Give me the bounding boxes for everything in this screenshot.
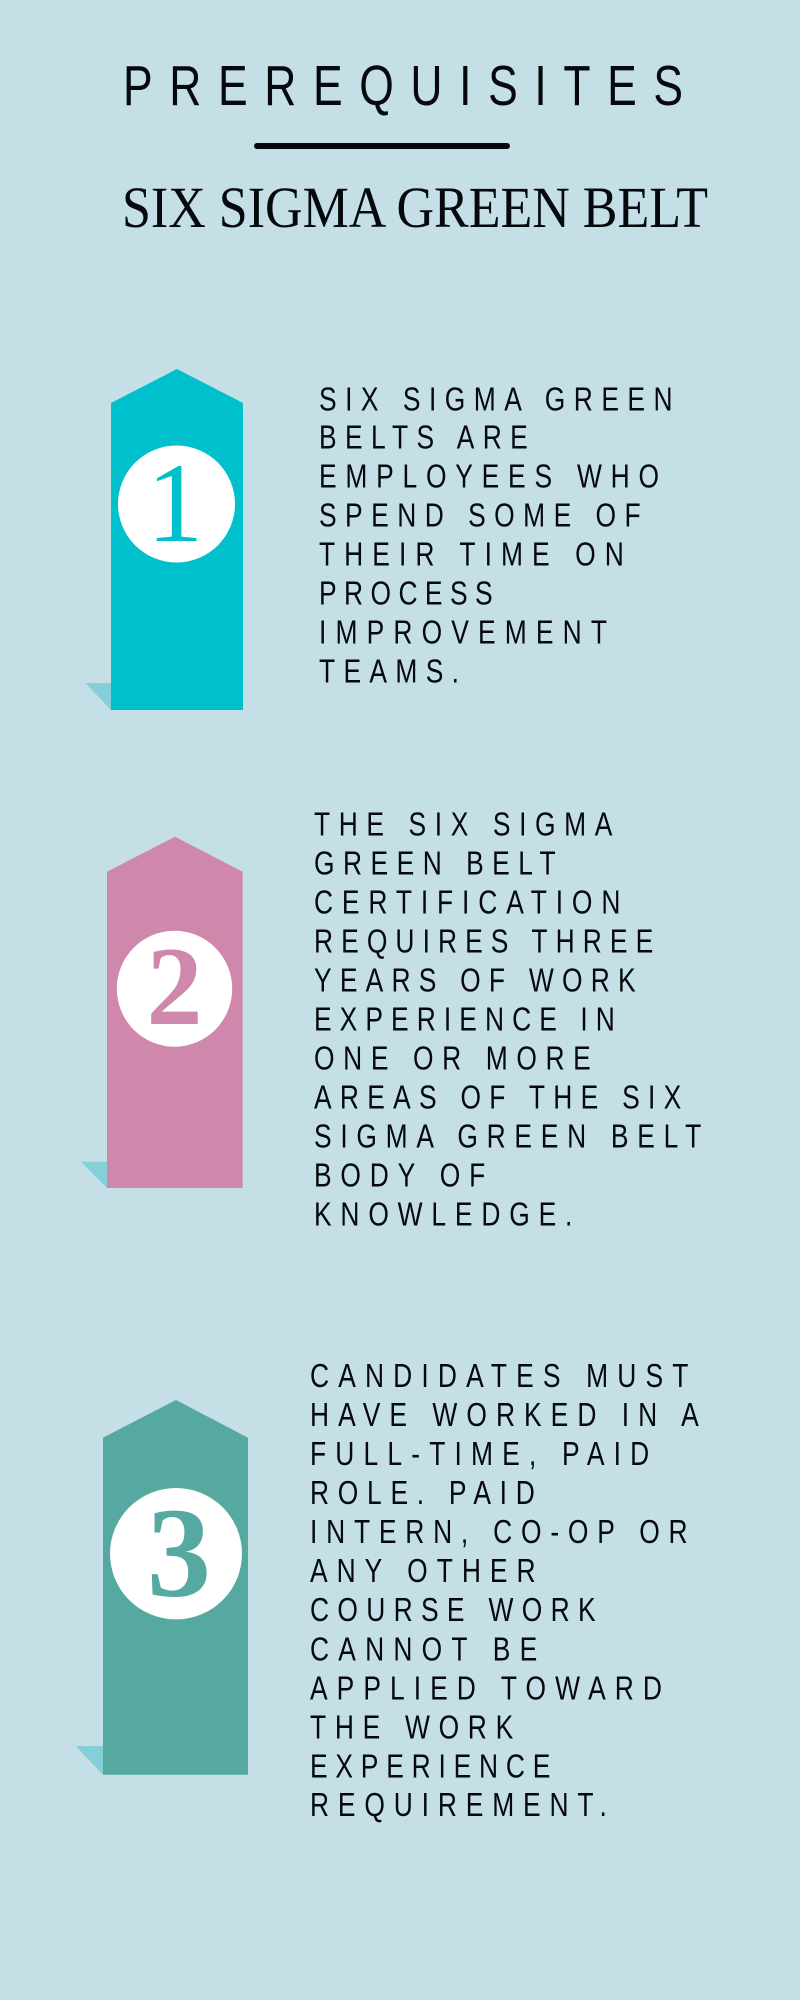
number badge: step 2 xyxy=(117,925,232,1049)
text block: step 2: THE SIX SIGMA xyxy=(314,807,612,843)
number badge: step 1 xyxy=(118,441,235,566)
text block: step 3: ROLE. PAID xyxy=(310,1475,535,1512)
text block: step 1: SPEND SOME OF xyxy=(319,498,641,534)
text block: step 3: APPLIED TOWARD xyxy=(310,1671,662,1707)
title underline xyxy=(254,143,510,149)
arrow banner: step 3 xyxy=(103,1400,248,1775)
text block: step 3: REQUIREMENT. xyxy=(310,1787,607,1824)
panel: step 1 xyxy=(86,369,673,710)
text block: step 2: KNOWLEDGE. xyxy=(314,1197,572,1233)
text block: step 2: AREAS OF THE SIX xyxy=(314,1080,681,1116)
text block: step 1 xyxy=(319,382,673,690)
text block: step 2: YEARS OF WORK xyxy=(314,963,636,999)
text block: step 3: THE WORK xyxy=(310,1710,513,1746)
text block: step 3: HAVE WORKED IN A xyxy=(310,1397,699,1434)
text block: step 1: PROCESS xyxy=(319,576,493,612)
text block: step 1: BELTS ARE xyxy=(319,420,528,456)
text block: step 1: IMPROVEMENT xyxy=(319,615,607,651)
panel: step 3 xyxy=(76,1358,699,1824)
text block: step 1: THEIR TIME ON xyxy=(319,537,624,573)
text block: step 3: COURSE WORK xyxy=(310,1592,596,1629)
number badge: step 2: 2 xyxy=(146,925,202,1049)
text block: step 2: SIGMA GREEN BELT xyxy=(314,1119,701,1155)
text block: step 1: SIX SIGMA GREEN xyxy=(319,382,673,418)
text block: step 2: GREEN BELT xyxy=(314,846,556,882)
number badge: step 3 xyxy=(110,1482,242,1624)
text block: step 3: CANNOT BE xyxy=(310,1632,537,1668)
fold: step 1 xyxy=(86,683,111,710)
text block: step 2: BODY OF xyxy=(314,1158,485,1194)
fold: step 3 xyxy=(76,1746,103,1775)
text block: step 3: ANY OTHER xyxy=(310,1553,536,1590)
text block: step 2: EXPERIENCE IN xyxy=(314,1002,615,1038)
arrow banner: step 2 xyxy=(107,837,243,1188)
text block: step 3 xyxy=(310,1358,699,1824)
title: PREREQUISITES xyxy=(123,54,683,117)
arrow banner: step 1 xyxy=(111,369,243,710)
text block: step 2: CERTIFICATION xyxy=(314,885,620,921)
fold: step 2 xyxy=(81,1162,107,1188)
text block: step 3: FULL-TIME, PAID xyxy=(310,1436,649,1473)
text block: step 1: EMPLOYEES WHO xyxy=(319,459,659,495)
text block: step 3: CANDIDATES MUST xyxy=(310,1358,688,1395)
text block: step 3: EXPERIENCE xyxy=(310,1749,550,1785)
number badge: step 1: 1 xyxy=(147,441,203,566)
panel: step 2 xyxy=(81,807,701,1233)
number badge: step 3: 3 xyxy=(147,1482,211,1624)
text block: step 2: REQUIRES THREE xyxy=(314,924,653,960)
text block: step 1: TEAMS. xyxy=(319,654,459,690)
text block: step 2: ONE OR MORE xyxy=(314,1041,591,1077)
text block: step 3: INTERN, CO-OP OR xyxy=(310,1514,688,1551)
text block: step 2 xyxy=(314,807,701,1233)
header xyxy=(122,54,708,240)
subtitle: SIX SIGMA GREEN BELT xyxy=(122,175,708,240)
